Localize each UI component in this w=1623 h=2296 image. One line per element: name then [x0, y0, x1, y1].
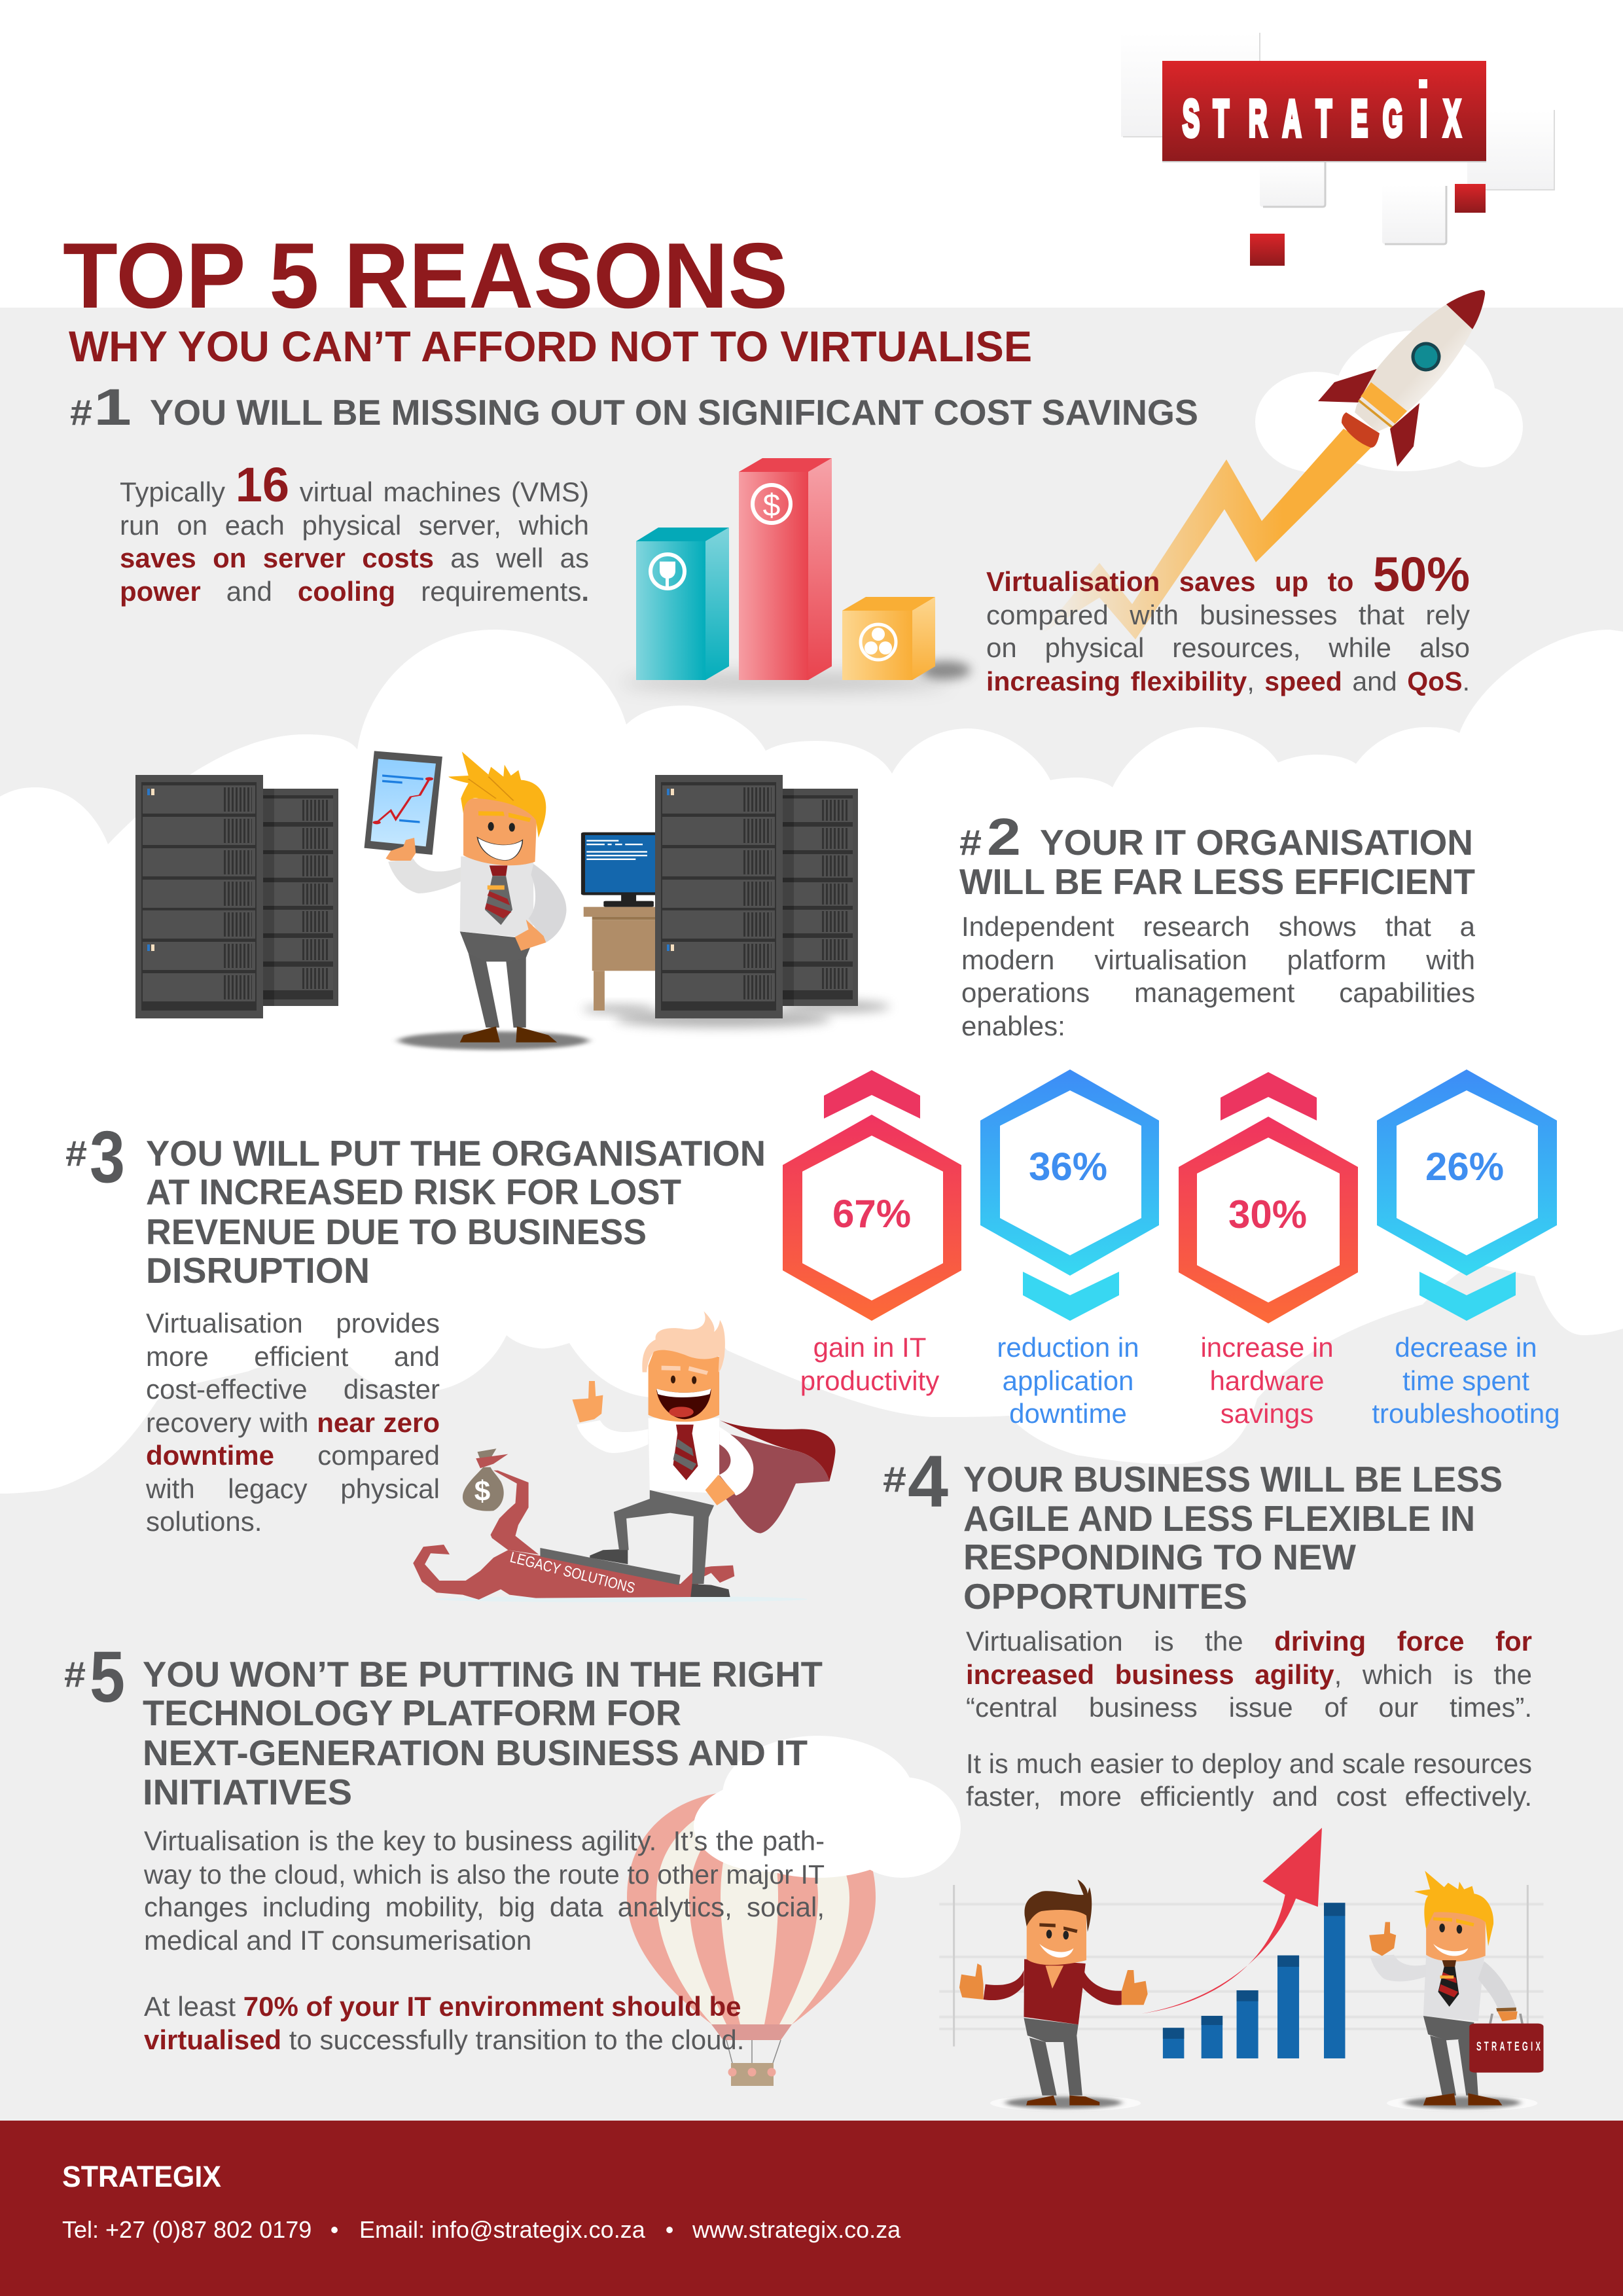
- footer contact details: Email: info@strategix.co.za: [359, 2216, 646, 2243]
- footer contact details: [62, 2216, 901, 2243]
- desk with computer monitor: [581, 833, 659, 1011]
- text block: business agility: “central business issue of our times”.: [966, 1692, 1532, 1723]
- logo: Strategix: [1162, 61, 1486, 162]
- server rack shadows: [582, 1001, 890, 1028]
- stat: 67% gain in IT productivity: 67%: [832, 1192, 911, 1236]
- heading: reason 5: NEXT-GENERATION BUSINESS AND IT: [143, 1732, 808, 1773]
- heading: reason 1: [70, 378, 1198, 436]
- text block: independent research: operations management capabilities: [961, 977, 1475, 1008]
- text block: 16 virtual machines: power and cooling requirements.: [120, 576, 589, 606]
- stat: 30% increase in hardware savings: 30%: [1228, 1193, 1307, 1236]
- label: reduction in application downtime: application: [1003, 1365, 1133, 1395]
- heading: reason 4: #: [883, 1459, 906, 1499]
- label: gain in IT productivity: productivity: [800, 1365, 939, 1395]
- red bar with dollar icon: $: [763, 488, 780, 523]
- heading: reason 5: INITIATIVES: [143, 1772, 352, 1812]
- text block: virtualisation saves up to 50%: compared with businesses that rely: [986, 600, 1470, 630]
- text block: key to business agility: At least 70% of your IT environment should be: [144, 1991, 741, 2022]
- heading: reason 2: [959, 808, 1475, 902]
- label: decrease in time spent troubleshooting: time spent: [1402, 1365, 1529, 1395]
- orange bar with fan icon: [842, 597, 935, 680]
- text block: key to business agility: way to the cloud, which is also the route to other major IT: [144, 1859, 825, 1889]
- text block: virtualisation saves up to 50%: increasing flexibility, speed and QoS.: [986, 666, 1470, 696]
- text block: business agility: It is much easier to deploy and scale resources: [966, 1749, 1532, 1779]
- blonde man with briefcase: [1369, 1871, 1544, 2111]
- heading: reason 3: YOU WILL PUT THE ORGANISATION: [146, 1133, 766, 1174]
- text block: disaster recovery: Virtualisation provides: [146, 1308, 440, 1338]
- chart illustration: growth bars, red arrow and two businessmen: STRATEGIX: [1476, 2040, 1543, 2054]
- heading: reason 2: 2: [987, 808, 1021, 866]
- footer contact details: •: [330, 2216, 338, 2243]
- text block: key to business agility: medical and IT consumerisation: [144, 1924, 531, 1956]
- heading: reason 5: YOU WON’T BE PUTTING IN THE RIGHT: [143, 1654, 823, 1695]
- text block: virtualisation saves up to 50%: on physical resources, while also: [986, 632, 1470, 663]
- label: increase in hardware savings: savings: [1221, 1398, 1313, 1429]
- text block: disaster recovery: [146, 1308, 440, 1537]
- label: decrease in time spent troubleshooting: decrease in: [1395, 1332, 1537, 1363]
- cloud behind rocket: [1255, 331, 1523, 473]
- stat: 30% increase in hardware savings: [1179, 1072, 1358, 1323]
- text block: business agility: Virtualisation is the driving force for: [966, 1626, 1532, 1657]
- subtitle: WHY YOU CAN’T AFFORD NOT TO VIRTUALISE: [69, 322, 1032, 370]
- text block: business agility: [966, 1626, 1532, 1812]
- heading: reason 2: YOUR IT ORGANISATION: [1040, 822, 1473, 863]
- logo: Strategix: STRATEGIX: [1183, 90, 1461, 147]
- cloud over balloon: [694, 1736, 961, 1878]
- heading: reason 2: WILL BE FAR LESS EFFICIENT: [959, 861, 1475, 902]
- label: gain in IT productivity: [800, 1332, 940, 1395]
- footer company name: STRATEGIX: [62, 2160, 221, 2193]
- server rack left: [135, 775, 338, 1018]
- text block: key to business agility: [144, 1825, 825, 2055]
- blue bars: [1163, 1903, 1345, 2058]
- text block: independent research: [961, 911, 1475, 1041]
- text block: disaster recovery: solutions.: [146, 1506, 262, 1537]
- text block: key to business agility: changes including mobility, big data analytics, social,: [144, 1892, 825, 1922]
- footer band: [0, 2121, 1623, 2296]
- footer contact details: www.strategix.co.za: [692, 2216, 901, 2243]
- heading: reason 4: YOUR BUSINESS WILL BE LESS: [963, 1459, 1503, 1499]
- text block: disaster recovery: more efficient and: [146, 1340, 440, 1372]
- red bar with dollar icon: [739, 458, 832, 680]
- heading: reason 4: 4: [908, 1441, 948, 1522]
- heading: reason 5: [64, 1637, 823, 1812]
- heading: reason 4: RESPONDING TO NEW: [963, 1537, 1356, 1577]
- label: increase in hardware savings: increase in: [1200, 1332, 1334, 1363]
- stat: 26% decrease in time spent troubleshooting: 26%: [1425, 1145, 1504, 1189]
- label: reduction in application downtime: reduction in: [997, 1332, 1139, 1363]
- heading: reason 5: 5: [90, 1637, 125, 1717]
- teal bar with plug icon: [636, 528, 729, 680]
- label: increase in hardware savings: hardware: [1209, 1365, 1325, 1395]
- text block: independent research: modern virtualisation platform with: [961, 944, 1475, 975]
- label: gain in IT productivity: gain in IT: [813, 1332, 926, 1363]
- heading: reason 4: OPPORTUNITES: [963, 1576, 1247, 1617]
- text block: key to business agility: Virtualisation is the key to business agility. It’s the path-: [144, 1825, 825, 1856]
- heading: reason 3: 3: [90, 1116, 125, 1198]
- heading: reason 2: #: [959, 822, 982, 863]
- text block: 16 virtual machines: saves on server costs as well as: [120, 543, 589, 573]
- character: hero stepping on legacy solutions: $: [474, 1475, 490, 1507]
- heading: reason 3: REVENUE DUE TO BUSINESS: [146, 1211, 647, 1252]
- heading: reason 5: TECHNOLOGY PLATFORM FOR: [143, 1693, 681, 1733]
- logo decoration panels: [1121, 33, 1554, 266]
- label: decrease in time spent troubleshooting: [1372, 1332, 1560, 1429]
- label: reduction in application downtime: [997, 1332, 1139, 1429]
- heading: reason 1: YOU WILL BE MISSING OUT ON SIGNIFICANT COST SAVINGS: [150, 392, 1198, 433]
- heading: reason 4: [883, 1441, 1503, 1617]
- text block: virtualisation saves up to 50%: [986, 547, 1470, 696]
- rocket: [1318, 290, 1485, 467]
- heading: reason 5: #: [64, 1654, 86, 1695]
- heading: reason 1: #: [70, 392, 92, 433]
- footer contact details: •: [666, 2216, 673, 2243]
- stat: 36% reduction in application downtime: [980, 1069, 1159, 1321]
- label: reduction in application downtime: downtime: [1009, 1398, 1127, 1429]
- character: hero stepping on legacy solutions: LEGACY SOLUTIONS: [508, 1549, 637, 1596]
- heading: reason 1: 1: [94, 378, 132, 436]
- stat: 36% reduction in application downtime: 36%: [1029, 1145, 1107, 1189]
- heading: reason 3: AT INCREASED RISK FOR LOST: [146, 1172, 681, 1212]
- label: decrease in time spent troubleshooting: troubleshooting: [1372, 1398, 1560, 1429]
- text block: disaster recovery: downtime compared: [146, 1440, 440, 1471]
- growth zigzag arrow: [1040, 429, 1372, 639]
- text block: 16 virtual machines: Typically 16 virtual machines (VMS): [120, 457, 589, 512]
- heading: reason 4: AGILE AND LESS FLEXIBLE IN: [963, 1498, 1475, 1539]
- text block: business agility: faster, more efficiently and cost effectively.: [966, 1781, 1532, 1812]
- text block: virtualisation saves up to 50%: Virtualisation saves up to 50%: [986, 547, 1470, 601]
- text block: disaster recovery: recovery with near zero: [146, 1407, 440, 1437]
- text block: 16 virtual machines: run on each physical server, which: [120, 509, 589, 541]
- text block: independent research: Independent research shows that a: [961, 911, 1475, 942]
- character: hero stepping on legacy solutions: [413, 1311, 835, 1602]
- background cloud band: [0, 630, 1623, 1494]
- title: TOP 5 REASONS: [63, 224, 788, 328]
- hexagon statistics: [783, 1069, 1557, 1323]
- text block: key to business agility: virtualised to successfully transition to the cloud.: [144, 2024, 744, 2055]
- text block: business agility: increased business agility, which is the: [966, 1659, 1532, 1690]
- text block: 16 virtual machines: [120, 457, 589, 606]
- brown-haired man thumbs up: [959, 1880, 1148, 2111]
- character: blonde man holding tablet: [365, 751, 588, 1050]
- heading: reason 3: DISRUPTION: [146, 1250, 370, 1291]
- hot air balloon: [627, 1790, 876, 2086]
- text block: disaster recovery: cost-effective disaster: [146, 1374, 440, 1405]
- server rack right: [655, 775, 858, 1018]
- chart illustration: growth bars, red arrow and two businessmen: [939, 1828, 1544, 2111]
- cost savings 3D bar chart: [622, 458, 971, 690]
- footer contact details: Tel: +27 (0)87 802 0179: [62, 2216, 312, 2243]
- stat: 26% decrease in time spent troubleshooting: [1377, 1069, 1557, 1321]
- label: increase in hardware savings: [1200, 1332, 1334, 1429]
- heading: reason 3: [65, 1116, 766, 1291]
- text block: independent research: enables:: [961, 1011, 1065, 1041]
- text block: disaster recovery: with legacy physical: [146, 1473, 440, 1504]
- stat: 67% gain in IT productivity: [783, 1070, 961, 1321]
- heading: reason 3: #: [65, 1133, 87, 1174]
